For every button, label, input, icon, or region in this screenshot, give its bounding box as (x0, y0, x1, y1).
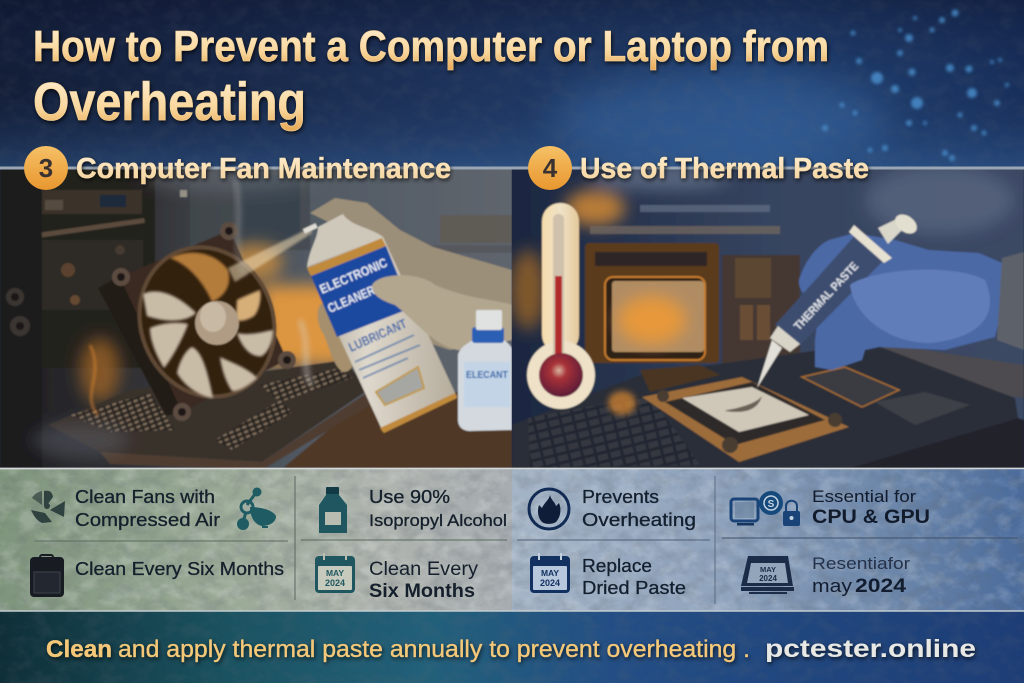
text: prevents overheating: Overheating (582, 509, 696, 530)
background boards (590, 205, 800, 370)
circuit board (512, 340, 1024, 468)
icon: calendar may 2024: MAY (541, 568, 559, 578)
panel: fan maintenance illustration (0, 160, 512, 470)
icon: laptop calendar: MAY (760, 565, 776, 574)
thermometer (527, 203, 595, 409)
small bottle (458, 310, 512, 431)
section heading: use of thermal paste: Use of Thermal Paste (580, 153, 869, 185)
icon: calendar may 2024: 2024 (540, 578, 560, 588)
text: isopropyl alcohol: Use 90% (369, 487, 450, 507)
text: essential for cpu and gpu: CPU & GPU (812, 507, 930, 528)
text: resentiafor may 2024: 2024 (855, 576, 907, 597)
text: prevents overheating: Prevents (582, 486, 659, 507)
panel: thermal paste tips (0, 468, 1024, 612)
website: pctester.online (765, 635, 976, 663)
icon: calendar may 2024: 2024 (325, 578, 345, 588)
icon: alcohol bottle (319, 487, 347, 533)
spray mist and smoke (90, 180, 312, 415)
icon: flame in circle (529, 489, 569, 529)
hot socket (585, 243, 719, 363)
syringe: THERMAL PASTE (791, 259, 861, 333)
orange glow (80, 244, 347, 402)
left dark column (6, 180, 42, 467)
laptop (30, 360, 372, 470)
text: clean fans: Clean Fans with (75, 487, 215, 507)
spray can: CLEANER (325, 282, 378, 316)
cpu and paste (608, 377, 849, 462)
syringe (757, 211, 920, 388)
number badge 3 (24, 146, 68, 190)
hand in glove, back (310, 198, 512, 350)
text: clean fans: Compressed Air (75, 510, 220, 530)
text: clean every six months: Clean Every Six Months (75, 559, 284, 579)
footer banner (0, 611, 1024, 683)
text: clean every six months bold: Clean Every (369, 559, 479, 580)
spray can: ELECTRONIC (317, 255, 390, 297)
section heading: computer fan maintenance (0, 146, 1024, 190)
icon: dusty fan (98, 222, 297, 421)
icon: monitor coin lock (731, 491, 800, 526)
text: resentiafor may 2024: may (812, 576, 852, 596)
icon: fan (31, 491, 65, 523)
small bottle: ELECANT (466, 370, 508, 381)
icon: laptop calendar: 2024 (759, 574, 777, 583)
icon: calendar may 2024 (315, 553, 355, 593)
gripping fingers behind can (318, 304, 354, 372)
text: essential for cpu and gpu: Essential for (812, 487, 916, 506)
section heading: computer fan maintenance: Computer Fan Maintenance (76, 153, 451, 185)
spray can: LUBRICANT (346, 316, 409, 355)
title: How to Prevent a Computer or Laptop from (33, 22, 829, 71)
gloved hand (799, 233, 1024, 370)
text: replace dried paste: Dried Paste (582, 577, 686, 598)
text: clean every six months bold: Six Months (369, 581, 475, 602)
number badge 4: 4 (543, 153, 558, 183)
footer message: and apply thermal paste annually to prevent overheating . (118, 636, 750, 663)
icon: calendar may 2024 (530, 553, 570, 593)
header background (0, 0, 1024, 170)
number badge 4 (528, 146, 572, 190)
text: resentiafor may 2024: Resentiafor (812, 554, 910, 573)
icon: blower (237, 488, 276, 530)
icon: calendar may 2024: MAY (326, 568, 344, 578)
machinery background (30, 160, 512, 368)
hand fingers, front (372, 275, 512, 350)
spray can (303, 214, 457, 433)
table (283, 390, 512, 468)
panel: fan tips (0, 468, 1024, 612)
number badge 3: 3 (39, 153, 53, 183)
icon: laptop calendar (741, 556, 794, 594)
icon: canister (30, 555, 64, 597)
text: isopropyl alcohol: Isopropyl Alcohol (369, 511, 507, 530)
glove index finger, front (850, 270, 990, 343)
icon: monitor coin lock: S (768, 499, 775, 510)
text: replace dried paste: Replace (582, 555, 652, 576)
panel: thermal paste illustration (510, 165, 1024, 468)
footer message: Clean (46, 636, 112, 663)
title: Overheating (33, 72, 306, 132)
section heading: use of thermal paste (528, 146, 869, 190)
fire glow (510, 165, 1015, 330)
title (33, 22, 829, 132)
